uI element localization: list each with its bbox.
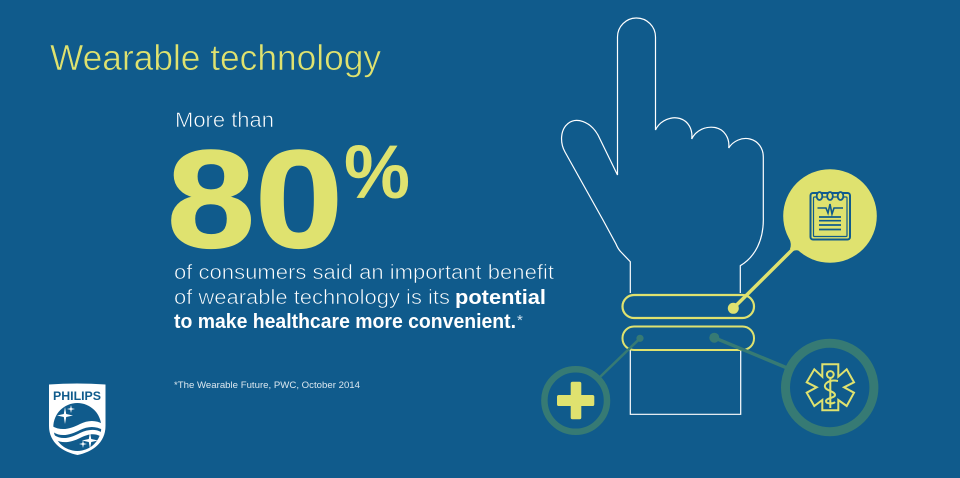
text block: statistic description: potential: [455, 287, 546, 309]
text block: statistic description: to make healthcare more convenient.: [174, 311, 516, 333]
logo: Philips shield: [49, 384, 106, 455]
wristband lower: [622, 326, 754, 350]
text block: statistic intro: More than: [175, 109, 274, 132]
statistic: 80 percent: 80: [167, 122, 343, 277]
title: Wearable technology: [50, 37, 381, 78]
icon: plus sign: [557, 382, 594, 419]
text block: statistic description: of consumers said an important benefit: [174, 261, 554, 284]
callout: star of life: [709, 333, 874, 432]
callout: plus: [544, 335, 644, 432]
logo: Philips shield: PHILIPS: [53, 389, 101, 403]
statistic: 80 percent: [167, 122, 410, 277]
callout: clipboard: [728, 169, 877, 314]
icon: medical clipboard: [810, 192, 850, 240]
text block: statistic description: *: [517, 312, 523, 329]
wristband upper: [622, 295, 754, 318]
hand outline: [562, 18, 763, 293]
wrist lower rectangle: [630, 350, 741, 414]
footnote: *The Wearable Future, PWC, October 2014: [174, 380, 360, 391]
statistic: 80 percent: %: [344, 130, 410, 215]
text block: statistic description: of wearable technology is its: [174, 286, 450, 309]
text block: statistic description: [174, 261, 554, 333]
icon: star of life: [807, 364, 854, 410]
